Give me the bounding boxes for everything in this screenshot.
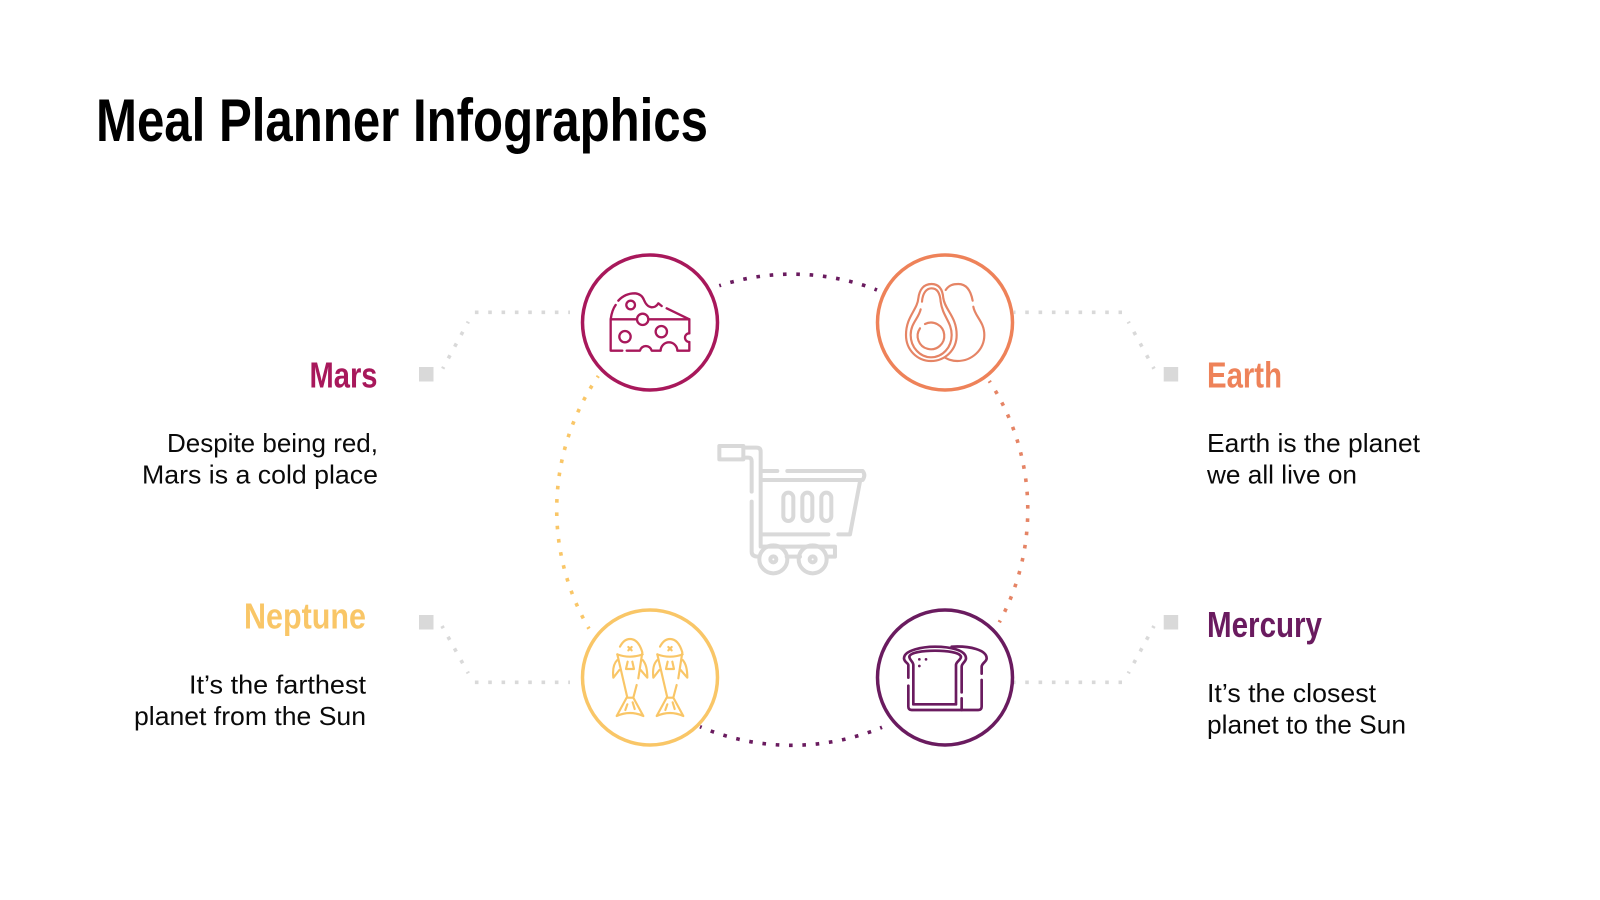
arc: left yellow dots <box>557 376 598 629</box>
ring circle: Neptune <box>582 610 718 745</box>
icon: shopping cart <box>719 446 864 573</box>
text: Mercury line 1: It’s the closest <box>1207 678 1377 708</box>
connector: Mars <box>443 312 570 369</box>
text: Neptune line 1: It’s the farthest <box>189 670 367 700</box>
text: Earth line 1: Earth is the planet <box>1207 428 1421 458</box>
marker: Neptune <box>419 615 434 630</box>
icon: fish <box>613 639 687 716</box>
fish left <box>613 639 647 716</box>
arc: top purple dots <box>719 274 877 290</box>
heading: Neptune: Neptune <box>244 596 366 636</box>
panel: Mars <box>142 354 378 490</box>
icon: avocado <box>906 284 984 361</box>
title: Meal Planner Infographics <box>96 87 708 154</box>
marker: Mercury <box>1164 615 1178 630</box>
icon: bread <box>904 647 987 710</box>
panel: Mercury <box>1207 604 1406 740</box>
text: Neptune line 2: planet from the Sun <box>134 701 366 731</box>
arc: bottom purple dots <box>700 727 882 745</box>
heading: Mars: Mars <box>310 354 378 396</box>
connector: Neptune <box>442 626 570 682</box>
text: Earth line 2: we all live on <box>1206 460 1357 490</box>
panel: Neptune <box>134 596 367 731</box>
fish right <box>653 639 687 716</box>
heading: Mercury: Mercury <box>1207 604 1322 645</box>
connector: Earth <box>1014 312 1154 369</box>
text: Mercury line 2: planet to the Sun <box>1207 710 1406 740</box>
arc: right orange dots <box>989 381 1028 622</box>
ring circle: Mars <box>582 255 718 390</box>
heading: Earth: Earth <box>1207 354 1282 396</box>
marker: Earth <box>1164 367 1178 382</box>
connector: Mercury <box>1014 626 1154 682</box>
panel: Earth <box>1206 354 1421 490</box>
ring circle: Mercury <box>878 610 1012 745</box>
text: Mars line 1: Despite being red, <box>167 428 378 458</box>
icon: cheese <box>611 293 689 351</box>
marker: Mars <box>419 367 434 382</box>
ring circle: Earth <box>878 255 1012 390</box>
text: Mars line 2: Mars is a cold place <box>142 460 378 490</box>
